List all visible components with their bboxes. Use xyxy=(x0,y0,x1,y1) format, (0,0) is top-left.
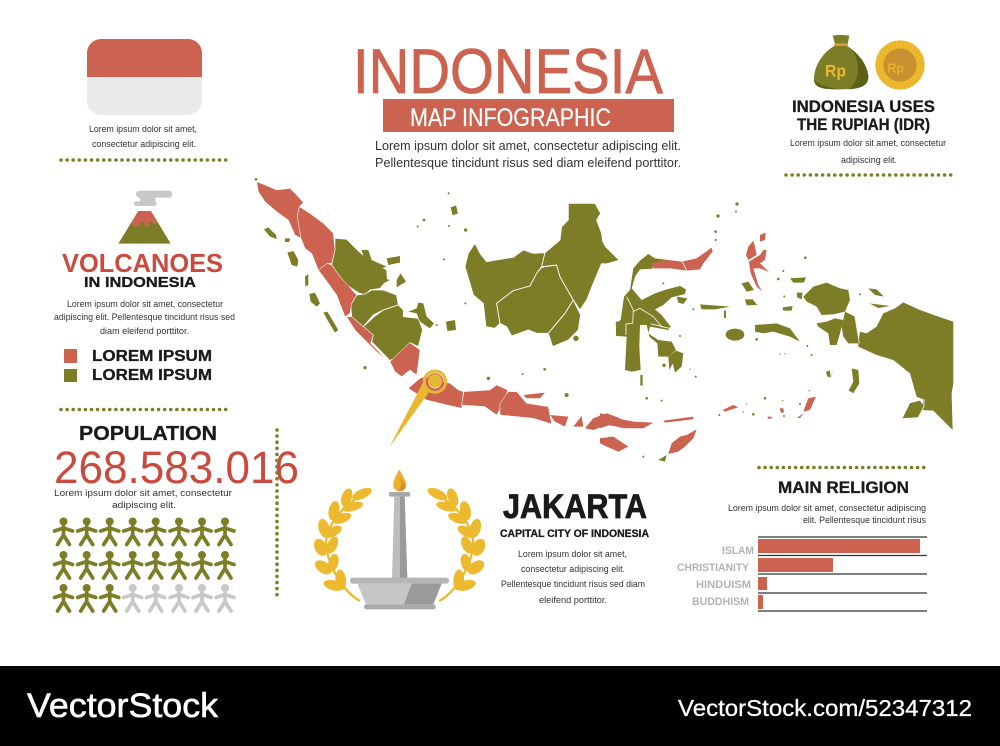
volcano description: adipiscing elit. Pellentesque tincidunt risus sed xyxy=(54,312,235,323)
title: MAP INFOGRAPHIC xyxy=(410,104,611,132)
currency description xyxy=(790,138,946,166)
religion description: elit. Pellentesque tincidunt risus xyxy=(803,515,926,526)
pictogram of people xyxy=(54,518,234,611)
population description: adipiscing elit. xyxy=(112,500,176,511)
icon: money bag and coin: Rp xyxy=(825,62,846,81)
Jakarta heading: CAPITAL CITY OF INDONESIA xyxy=(500,528,649,540)
currency heading xyxy=(792,98,935,134)
population description: Lorem ipsum dolor sit amet, consectetur xyxy=(54,488,232,499)
currency description: adipiscing elit. xyxy=(841,155,897,166)
volcano description: diam eleifend porttitor. xyxy=(100,326,189,337)
title: INDONESIA xyxy=(353,37,663,107)
religion description xyxy=(728,503,926,526)
icon: money bag and coin: Rp xyxy=(887,62,904,76)
legend: LOREM IPSUM xyxy=(92,348,212,365)
flag caption: Lorem ipsum dolor sit amet, xyxy=(89,124,197,135)
Jakarta description: Lorem ipsum dolor sit amet, xyxy=(518,549,627,560)
volcano heading xyxy=(62,248,223,291)
currency description: Lorem ipsum dolor sit amet, consectetur xyxy=(790,138,946,149)
bar chart: religions xyxy=(677,537,927,611)
bar chart: religions: CHRISTIANITY xyxy=(677,562,750,574)
title description: Lorem ipsum dolor sit amet, consectetur adipiscing elit. xyxy=(375,139,681,153)
legend xyxy=(64,348,212,384)
map: eastern islands xyxy=(598,202,953,462)
icon: volcano xyxy=(118,191,172,244)
volcano heading: IN INDONESIA xyxy=(84,274,196,291)
population description xyxy=(54,488,232,511)
flag caption xyxy=(89,124,197,150)
currency panel xyxy=(786,35,953,175)
bar chart: religions: HINDUISM xyxy=(696,579,751,591)
title xyxy=(353,37,674,132)
icon: Monas monument with laurel wreath xyxy=(311,469,488,609)
flag panel xyxy=(61,39,229,160)
title description xyxy=(375,139,681,170)
bar chart: religions: BUDDHISM xyxy=(692,596,749,608)
title description: Pellentesque tincidunt risus sed diam eleifend porttitor. xyxy=(375,156,681,170)
population panel xyxy=(54,423,299,611)
watermark footer bar xyxy=(0,666,1000,746)
population number: 268.583.016 xyxy=(54,442,299,493)
Jakarta panel xyxy=(311,469,649,609)
currency heading: THE RUPIAH (IDR) xyxy=(797,116,930,134)
map of Indonesia xyxy=(255,178,953,462)
Jakarta description xyxy=(501,549,645,606)
currency heading: INDONESIA USES xyxy=(792,98,935,116)
Jakarta heading: JAKARTA xyxy=(503,488,647,526)
religion heading: MAIN RELIGION xyxy=(778,478,909,497)
flag caption: consectetur adipiscing elit. xyxy=(92,139,196,150)
volcano heading: VOLCANOES xyxy=(62,248,223,278)
volcano description: Lorem ipsum dolor sit amet, consectetur xyxy=(67,299,223,310)
map: western islands xyxy=(255,178,620,452)
Jakarta description: Pellentesque tincidunt risus sed diam xyxy=(501,579,645,590)
religion description: Lorem ipsum dolor sit amet, consectetur adipiscing xyxy=(728,503,926,514)
icon: money bag and coin xyxy=(814,35,925,90)
bar chart: religions: ISLAM xyxy=(722,545,754,557)
watermark footer bar: VectorStock.com/52347312 xyxy=(678,695,972,721)
volcano panel xyxy=(54,191,235,410)
marker: Jakarta pin xyxy=(389,371,446,447)
population heading: POPULATION xyxy=(79,423,217,445)
watermark footer bar: VectorStock xyxy=(27,687,219,725)
Jakarta description: eleifend porttitor. xyxy=(539,595,607,606)
legend: LOREM IPSUM xyxy=(92,367,212,384)
Jakarta description: consectetur adipiscing elit. xyxy=(521,564,625,575)
volcano description xyxy=(54,299,235,337)
icon: Indonesian flag xyxy=(87,39,202,115)
religion panel xyxy=(677,468,927,611)
Jakarta heading xyxy=(500,488,649,540)
